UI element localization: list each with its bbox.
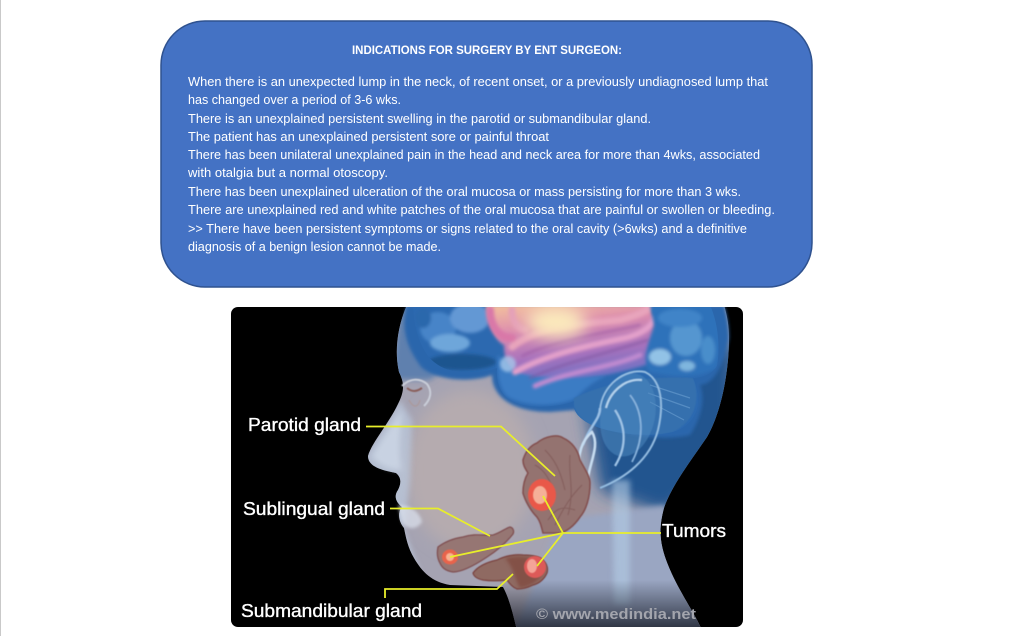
text block: indications list: [187, 75, 775, 254]
heading: INDICATIONS FOR SURGERY BY ENT SURGEON:: [352, 43, 622, 57]
panel: indications for surgery: [161, 21, 812, 287]
text block: indications list: There are unexplained red and white patches of the oral mucosa that are painful or swollen or bleeding.: [188, 203, 775, 217]
watermark: © www.medindia.net: [536, 607, 696, 623]
neck tone: [515, 505, 705, 630]
line: sublingual: [390, 508, 490, 536]
skull rim: [404, 305, 729, 438]
text block: indications list: There has been unilateral unexplained pain in the head and neck area for more than 4wks, associated: [188, 148, 760, 162]
label: sublingual gland: Sublingual gland: [243, 499, 385, 519]
head silhouette: [360, 300, 740, 635]
bottom fade: [500, 583, 700, 627]
image background: [231, 307, 743, 627]
eye: [402, 380, 430, 406]
tumors: [442, 479, 556, 578]
cheek tone: [410, 391, 530, 542]
highlights on temporal lobe: [500, 356, 516, 372]
cortex glow: [526, 306, 586, 338]
cerebellum: [574, 377, 696, 435]
frontal lobes: [415, 303, 496, 370]
label: submandibular gland: Submandibular gland: [241, 601, 422, 621]
nose and lip highlight: [372, 410, 402, 470]
label: parotid gland: Parotid gland: [248, 415, 361, 435]
panel background: [161, 21, 812, 287]
brain folds: [490, 307, 655, 386]
sublingual gland: [437, 527, 514, 572]
forehead blue: [396, 307, 438, 383]
text block: indications list: When there is an unexpected lump in the neck, of recent onset, or a previously undiagnosed lump that: [188, 75, 769, 89]
leader lines: [366, 426, 661, 598]
submandibular gland: [473, 555, 548, 589]
face front light: [368, 400, 422, 570]
neck vertical highlight: [612, 480, 630, 605]
back of head blue: [585, 340, 735, 515]
page edge line: [0, 0, 1, 636]
brain: [416, 307, 718, 434]
label: tumors: Tumors: [662, 521, 726, 541]
text block: indications list: >> There have been persistent symptoms or signs related to the oral cavity (>6wks) and a definitive: [188, 222, 747, 236]
line: submandibular: [385, 574, 513, 598]
text block: indications list: diagnosis of a benign lesion cannot be made.: [188, 240, 441, 254]
full page canvas: [0, 0, 813, 636]
text block: indications list: There is an unexplained persistent swelling in the parotid or submandibular gland.: [188, 112, 651, 126]
parotid gland: [523, 436, 590, 533]
line: tumors: [450, 496, 661, 566]
text block: indications list: There has been unexplained ulceration of the oral mucosa or mass persisting for more than 3 wks.: [188, 185, 741, 199]
text block: indications list: has changed over a period of 3-6 wks.: [188, 93, 401, 107]
pink cortex: [484, 307, 656, 380]
line: parotid: [366, 426, 555, 476]
tumor: submandibular: [524, 556, 546, 578]
medical illustration: salivary gland tumors: [231, 300, 743, 635]
temporal lobe blue: [498, 355, 606, 405]
text block: indications list: The patient has an unexplained persistent sore or painful throat: [188, 130, 550, 144]
ear: [579, 368, 663, 488]
labels: [241, 415, 726, 621]
text block: indications list: with otalgia but a normal otoscopy.: [187, 166, 388, 180]
tumor: sublingual: [442, 550, 458, 564]
tumor: parotid: [528, 479, 556, 511]
occipital lobes: [646, 305, 720, 376]
